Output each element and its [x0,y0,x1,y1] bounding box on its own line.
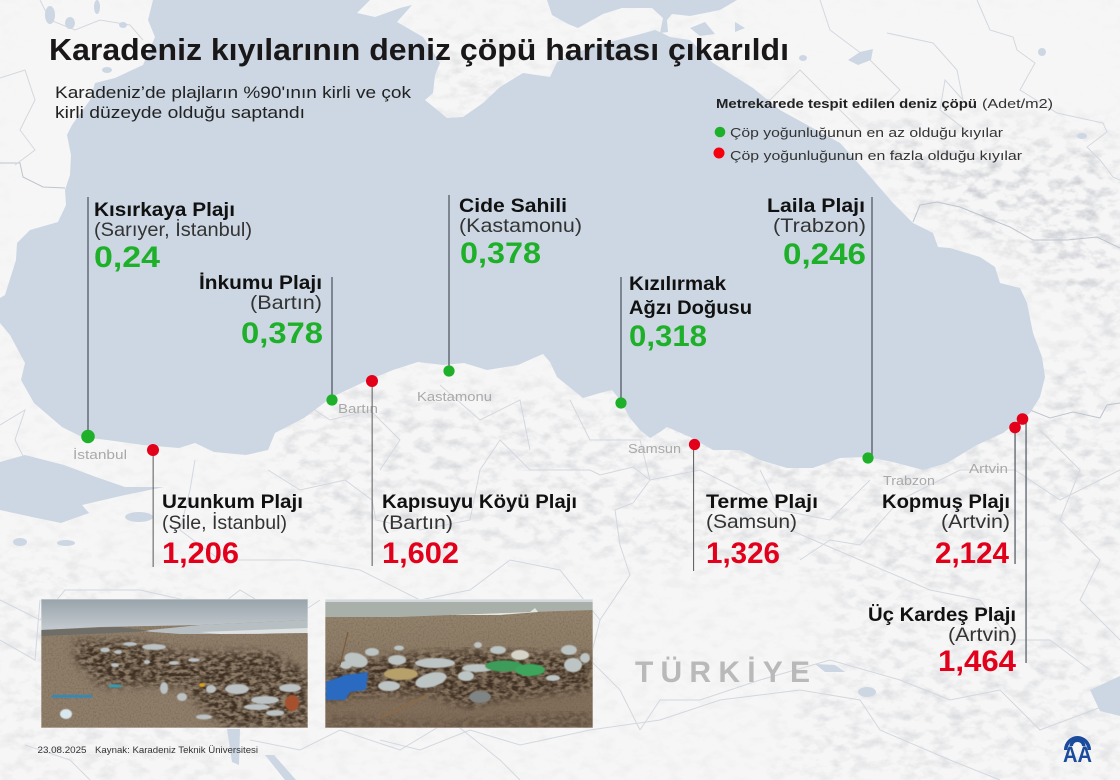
city names: Samsun [628,442,681,456]
beach: Kısırkaya: Kısırkaya Plajı [94,199,235,221]
beach: Terme [689,439,818,571]
legend unit: (Adet/m2) [982,96,1053,111]
beach: Laila: 0,246 [783,238,866,271]
beach: Kapısuyu: (Bartın) [382,512,453,534]
subtitle: kirli düzeyde olduğu saptandı [55,104,305,122]
beach: Kapısuyu [366,375,577,570]
beach: Uzunkum: Uzunkum Plajı [162,491,303,513]
beach: Uzunkum: 1,206 [162,537,239,570]
footer: date and source: 23.08.2025 [38,745,86,755]
beach: Kısırkaya [81,197,252,443]
beach: İnkumu: 0,378 [241,317,323,350]
beach: Kızılırmak [615,273,752,409]
beach: İnkumu: İnkumu Plajı [199,271,322,294]
legend [714,96,1053,163]
beach: Kopmuş: (Artvin) [941,511,1010,533]
beach: Cide [443,195,582,377]
leader line [87,197,89,436]
city names: Trabzon [883,474,935,488]
beach: Terme: Terme Plajı [706,491,818,513]
city names: İstanbul [73,448,127,462]
Sea of Azov [547,0,737,33]
beach: Uzunkum [147,444,303,570]
beach: Kopmuş: 2,124 [935,537,1010,570]
city names: Bartın [338,402,378,416]
beach: Üç Kardeş [868,413,1028,678]
legend item: lowest density: Çöp yoğunluğunun en az olduğu kıyılar [730,125,1004,140]
Black Sea [0,0,1045,470]
beach: Cide: 0,378 [460,237,541,270]
beach: Kapısuyu: 1,602 [382,537,459,570]
photo: littered beach, left [41,599,308,728]
beach: Laila: (Trabzon) [773,215,866,237]
beach: Kızılırmak: 0,318 [629,320,707,353]
subtitle: Karadeniz’de plajların %90'ının kirli ve çok [55,84,412,102]
title: Karadeniz kıyılarının deniz çöpü haritası çıkarıldı [49,32,789,67]
beach: Kapısuyu: Kapısuyu Köyü Plajı [382,491,577,513]
beach: Kopmuş: Kopmuş Plajı [882,491,1010,513]
city names: Artvin [969,462,1008,476]
country label: TÜRKİYE [635,656,810,689]
beach: Kısırkaya: (Sarıyer, İstanbul) [94,218,252,241]
beach: Üç Kardeş: 1,464 [938,645,1017,678]
beach: Cide: (Kastamonu) [459,215,582,237]
beach: Laila [767,195,874,464]
subtitle [55,84,412,122]
city names: Kastamonu [417,390,492,404]
beach: Terme: 1,326 [706,537,780,570]
photo: littered beach, right [325,599,593,728]
city names [73,390,1008,488]
beach: İnkumu: (Bartın) [250,292,322,314]
beach: Uzunkum: (Şile, İstanbul) [162,511,287,534]
beach: Kızılırmak: Ağzı Doğusu [629,297,752,319]
beach: Kızılırmak: Kızılırmak [629,273,726,295]
beach: Kısırkaya: 0,24 [94,241,161,274]
beach: Cide: Cide Sahili [459,195,567,217]
beach: Kopmuş [882,422,1021,570]
beach: Laila: Laila Plajı [767,195,865,217]
beach: Üç Kardeş: Üç Kardeş Plajı [868,603,1016,626]
beach: İnkumu [199,271,338,406]
beach: Üç Kardeş: (Artvin) [948,624,1017,646]
icon: AA logo: AA [1063,742,1092,767]
Sea of Marmara [0,455,164,523]
beach: Terme: (Samsun) [706,511,797,533]
legend heading: Metrekarede tespit edilen deniz çöpü [716,96,977,111]
pin [81,430,95,443]
footer: date and source: Kaynak: Karadeniz Teknik Üniversitesi [95,745,258,755]
legend item: highest density: Çöp yoğunluğunun en fazla olduğu kıyılar [730,148,1023,163]
